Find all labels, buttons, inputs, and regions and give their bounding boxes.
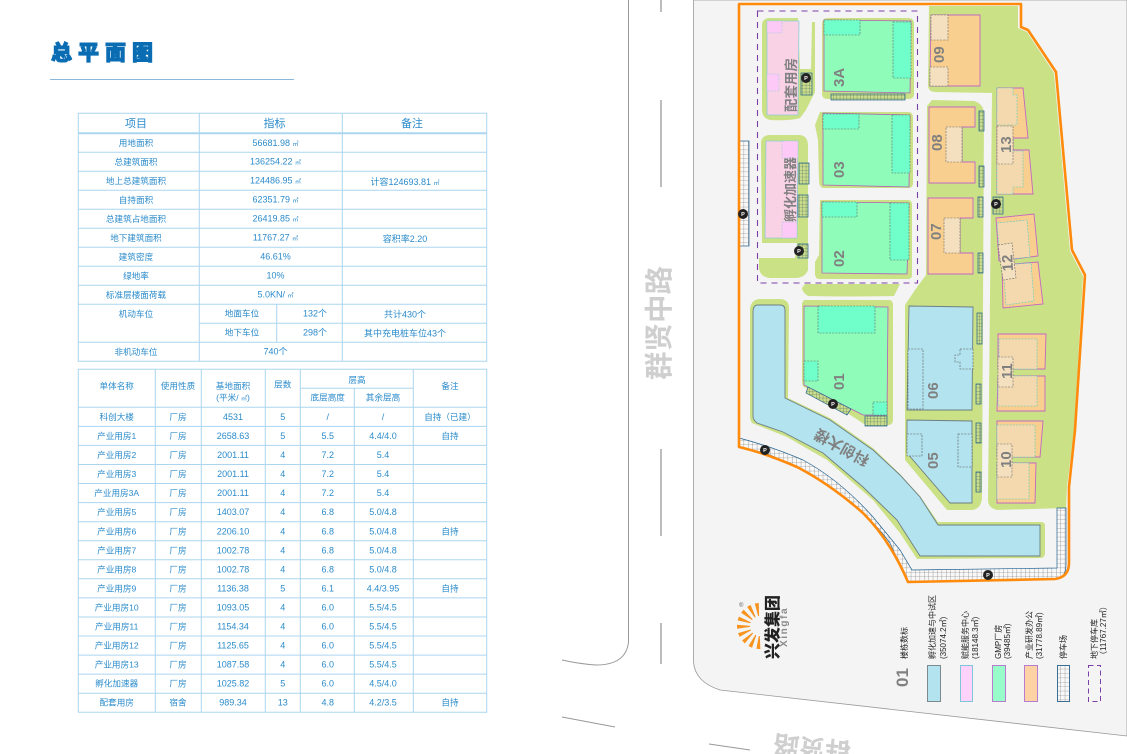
legend: R&D office: [1024, 611, 1044, 702]
table: building schedule: /: [382, 412, 385, 422]
table: building schedule: 4: [280, 507, 285, 517]
road lines: [562, 0, 750, 750]
table: building schedule: 1125.65: [217, 640, 249, 650]
icon: sunburst: [737, 603, 761, 649]
legend: R&D office: (31778.89㎡): [1035, 612, 1044, 659]
building 01: [804, 306, 888, 415]
parking markers: P: [831, 402, 835, 408]
table: building schedule: 科创大楼: [100, 411, 134, 422]
table: project indicators: 总建筑面积: [115, 156, 158, 167]
legend: enablement service center: (18148.3㎡): [971, 616, 980, 659]
table: building schedule: 4: [280, 469, 285, 479]
table: project indicators: 26419.85 ㎡: [252, 214, 299, 224]
table: building schedule: 底层高度: [311, 392, 345, 402]
table: project indicators: 124486.95 ㎡: [250, 176, 301, 186]
table: building schedule: 5: [280, 678, 285, 688]
table: building schedule: 6.0: [321, 622, 334, 632]
table: building schedule: 4: [280, 450, 285, 460]
table: project indicators: 绿地率: [123, 270, 149, 281]
green landscape: [750, 6, 1083, 559]
legend: parking: 停车场: [1058, 635, 1068, 659]
table: project indicators: 自持面积: [119, 194, 154, 205]
legend: enablement service center: [960, 611, 980, 702]
table: building schedule: 厂房: [169, 582, 187, 594]
table: project indicators: 10%: [266, 270, 285, 280]
table: building schedule: 13: [278, 698, 288, 708]
building 02: [822, 202, 909, 274]
table: building schedule: 6.1: [321, 584, 334, 594]
parking markers: P: [986, 573, 990, 579]
table: building schedule: 厂房: [169, 411, 187, 422]
legend: incubation zone: (35074.2㎡): [939, 616, 948, 659]
table: building schedule: 产业用房3: [97, 468, 136, 479]
table: building schedule: 6.8: [321, 526, 334, 536]
building 10: 10: [998, 451, 1015, 468]
table: building schedule: 4.5/4.0: [369, 678, 397, 688]
building 08: [929, 107, 975, 183]
table: building schedule: 1087.58: [217, 660, 249, 670]
table: project indicators: 共计430个: [384, 308, 426, 320]
table: building schedule: 产业用房13: [95, 658, 139, 670]
legend: underground garage: 地下停车库: [1089, 619, 1099, 659]
table: building schedule: 厂房: [169, 658, 187, 670]
table: building schedule: 自持: [441, 430, 459, 441]
table: building schedule: 产业用房1: [97, 430, 136, 441]
table: building schedule: 6.0: [321, 660, 334, 670]
building: incubator: 孵化加速器: [783, 157, 798, 222]
table: building schedule: 宿舍: [169, 696, 187, 708]
table: building schedule: 5.4: [377, 469, 389, 479]
table: building schedule: 1002.78: [217, 546, 249, 556]
table: building schedule: 基地面积: [216, 380, 251, 391]
table: project indicators: 其中充电桩车位43个: [364, 328, 446, 338]
table: project indicators: 740个: [263, 346, 288, 356]
table: building schedule: 厂房: [169, 487, 187, 498]
table: building schedule: 产业用房10: [95, 602, 139, 612]
table: building schedule: 厂房: [169, 468, 187, 479]
building 10: [997, 421, 1043, 503]
table: building schedule: 产业用房11: [95, 620, 139, 632]
table: building schedule: 4: [280, 660, 285, 670]
table: building schedule: 6.8: [321, 546, 334, 556]
table: building schedule: 5.4: [377, 450, 389, 460]
parking strip along boundary: [739, 438, 1066, 582]
table: project indicators: 地上总建筑面积: [106, 175, 166, 186]
table: project indicators: 备注: [401, 116, 423, 130]
table: building schedule: 4.8: [321, 698, 334, 708]
building 13: [997, 88, 1033, 194]
table: building schedule: 5: [280, 584, 285, 594]
table: building schedule: 产业用房2: [97, 449, 136, 460]
logo: Xingfa Group: ®: [739, 602, 744, 609]
table: building schedule: 4.2/3.5: [369, 698, 397, 708]
table: building schedule: 5: [280, 431, 285, 441]
table: project indicators: 地下车位: [225, 326, 260, 338]
table: building schedule: 5.0/4.8: [369, 526, 397, 536]
table: building schedule: 4: [280, 546, 285, 556]
table: building schedule: 5.4: [377, 488, 389, 498]
building 3A: [824, 20, 911, 93]
table: building schedule: 厂房: [169, 620, 187, 632]
legend: building number: [893, 627, 912, 687]
building 11: [997, 334, 1046, 411]
table: building schedule: 4.4/3.95: [367, 584, 399, 594]
table: project indicators: 机动车位: [119, 308, 154, 319]
table: project indicators: 46.61%: [260, 252, 291, 262]
legend: incubation zone: 孵化加速与中试区: [927, 595, 937, 659]
parking markers: P: [804, 76, 808, 82]
parking markers: P: [763, 448, 767, 454]
legend: R&D office: 产业研发办公: [1024, 611, 1034, 659]
building 05: 05: [925, 452, 942, 469]
table: building schedule: 使用性质: [161, 380, 196, 391]
building 07: [928, 198, 973, 274]
parking markers: [738, 73, 1001, 580]
table: building schedule: 2001.11: [217, 488, 249, 498]
building 06: [907, 306, 973, 410]
table: building schedule: 4: [280, 488, 285, 498]
legend: GMP plant: [992, 623, 1012, 702]
table: building schedule: (平米/ ㎡): [216, 392, 250, 402]
table: building schedule: 6.8: [321, 564, 334, 574]
table: building schedule: 7.2: [321, 488, 334, 498]
parking markers: P: [797, 249, 801, 255]
table: building schedule: 1136.38: [217, 584, 249, 594]
table: building schedule: 6.0: [321, 678, 334, 688]
table: building schedule: 厂房: [169, 449, 187, 460]
table: building schedule: 2001.11: [217, 469, 249, 479]
table: project indicators: 5.0KN/ ㎡: [257, 290, 294, 300]
table: building schedule: 孵化加速器: [95, 678, 139, 688]
table: building schedule: 自持: [441, 696, 459, 708]
table: building schedule: 产业用房5: [97, 506, 136, 517]
table: project indicators: 132个: [303, 308, 327, 318]
table: project indicators: 136254.22 ㎡: [250, 156, 301, 166]
table: building schedule: 厂房: [169, 506, 187, 517]
table: building schedule: 5.5/4.5: [369, 640, 397, 650]
building 06: 06: [925, 382, 942, 399]
table: building schedule: 5.0/4.8: [369, 507, 397, 517]
table: building schedule: 6.0: [321, 602, 334, 612]
table: building schedule: 4: [280, 526, 285, 536]
building 09: [930, 15, 980, 86]
table: building schedule: 7.2: [321, 469, 334, 479]
building 03: [823, 113, 910, 187]
table: project indicators: 非机动车位: [115, 346, 158, 357]
legend: underground garage: （11767.27㎡）: [1099, 602, 1108, 659]
table: building schedule: /: [326, 412, 329, 422]
table: building schedule: 1002.78: [217, 564, 249, 574]
table: building schedule: 产业用房9: [97, 582, 136, 594]
table: building schedule: [78, 369, 487, 712]
table: building schedule: 1154.34: [217, 622, 249, 632]
table: building schedule: 7.2: [321, 450, 334, 460]
table: building schedule: 5.5/4.5: [369, 602, 397, 612]
legend: GMP plant: GMP厂房: [993, 625, 1003, 659]
logo: Xingfa Group: Xingfa: [779, 607, 790, 647]
legend: enablement service center: 赋能服务中心: [960, 611, 970, 659]
table: building schedule: 产业用房8: [97, 564, 136, 574]
legend: building number: 楼栋数标: [899, 627, 909, 659]
table: building schedule: 2206.10: [217, 526, 249, 536]
road name: Qunxian Middle Road: 群贤中路: [644, 265, 676, 380]
table: building schedule: 层数: [274, 378, 292, 390]
title: 总平面图: [51, 41, 159, 65]
table: building schedule: 备注: [441, 380, 459, 391]
table: project indicators: 项目: [125, 117, 147, 130]
table: building schedule: 5: [280, 412, 285, 422]
table: building schedule: 4: [280, 622, 285, 632]
table: project indicators: 62351.79 ㎡: [252, 194, 299, 204]
table: building schedule: 5.0/4.8: [369, 564, 397, 574]
table: building schedule: 自持: [441, 526, 459, 536]
building: Kechuang tower: 科创大楼: [811, 425, 873, 469]
table: building schedule: 厂房: [169, 564, 187, 574]
table: project indicators: 计容124693.81 ㎡: [370, 176, 440, 187]
table: building schedule: 产业用房6: [97, 526, 136, 536]
building: support housing: 配套用房: [783, 58, 799, 112]
table: building schedule: 层高: [348, 374, 366, 385]
site boundary: [739, 4, 1085, 582]
table: project indicators: 11767.27 ㎡: [253, 232, 298, 242]
table: building schedule: 4.4/4.0: [369, 431, 397, 441]
table: building schedule: 5.5: [321, 431, 334, 441]
building 02: 02: [831, 250, 848, 267]
table: project indicators: [78, 113, 487, 362]
legend: GMP plant: (39485㎡): [1003, 623, 1012, 659]
building: Kechuang tower: [753, 305, 1040, 556]
building 3A: 3A: [831, 68, 848, 87]
building 03: 03: [831, 161, 848, 178]
building 05: [907, 420, 972, 503]
table: building schedule: 5.5/4.5: [369, 660, 397, 670]
site ground: [694, 0, 1127, 736]
underground garage boundary: [758, 11, 918, 283]
building 08: 08: [929, 134, 946, 151]
table: building schedule: 产业用房3A: [94, 487, 139, 498]
table: building schedule: 1093.05: [217, 602, 249, 612]
table: project indicators: 容积率2.20: [383, 233, 427, 244]
building 09: 09: [931, 46, 948, 63]
table: building schedule: 厂房: [169, 430, 187, 441]
table: building schedule: 厂房: [169, 544, 187, 556]
table: project indicators: 56681.98 ㎡: [252, 138, 299, 148]
table: building schedule: 厂房: [169, 526, 187, 536]
building: support housing: [767, 21, 799, 115]
building 12: [996, 214, 1043, 308]
table: building schedule: 5.5/4.5: [369, 622, 397, 632]
table: building schedule: 产业用房7: [97, 544, 136, 556]
table: project indicators: 指标: [264, 116, 286, 130]
legend: parking: [1058, 635, 1070, 702]
table: building schedule: 配套用房: [100, 696, 134, 708]
building 07: 07: [928, 223, 945, 240]
table: building schedule: 2658.63: [217, 431, 249, 441]
table: project indicators: 建筑密度: [119, 251, 154, 262]
parking markers: P: [741, 212, 745, 218]
table: project indicators: 标准层楼面荷载: [106, 289, 166, 300]
building 12: 12: [999, 254, 1017, 272]
table: building schedule: 989.34: [219, 698, 247, 708]
table: building schedule: 4531: [223, 412, 243, 422]
table: building schedule: 产业用房12: [95, 640, 139, 650]
legend: underground garage: [1088, 602, 1108, 702]
table: project indicators: 地下建筑面积: [110, 232, 162, 243]
table: building schedule: 2001.11: [217, 450, 249, 460]
table: building schedule: 厂房: [169, 602, 187, 612]
building 13: 13: [998, 136, 1015, 153]
table: building schedule: 4: [280, 602, 285, 612]
logo: Xingfa Group: 兴发集团: [763, 595, 782, 659]
building 01: 01: [831, 373, 848, 390]
table: project indicators: 地面车位: [225, 308, 260, 318]
table: building schedule: 自持: [441, 582, 459, 594]
logo: Xingfa Group: [737, 595, 790, 659]
table: building schedule: 4: [280, 640, 285, 650]
table: building schedule: 4: [280, 564, 285, 574]
table: building schedule: 6.0: [321, 640, 334, 650]
table: project indicators: 298个: [303, 328, 327, 338]
table: building schedule: 其余层高: [366, 392, 401, 402]
table: building schedule: 自持（已建）: [424, 411, 476, 422]
parking strip west: [739, 141, 749, 246]
table: building schedule: 5.0/4.8: [369, 546, 397, 556]
legend: incubation zone: [927, 595, 948, 702]
parking bays: [798, 73, 1003, 492]
table: building schedule: 厂房: [169, 640, 187, 650]
building: incubator: [765, 141, 798, 238]
table: project indicators: 用地面积: [119, 137, 154, 148]
legend: building number: 01: [893, 668, 912, 687]
parking markers: P: [994, 202, 998, 208]
table: building schedule: 厂房: [169, 678, 187, 688]
table: building schedule: 6.8: [321, 507, 334, 517]
table: building schedule: 1025.82: [217, 678, 249, 688]
building 11: 11: [999, 363, 1016, 379]
legend: [893, 595, 1108, 702]
table: building schedule: 单体名称: [100, 380, 134, 391]
table: building schedule: 1403.07: [217, 507, 249, 517]
table: project indicators: 总建筑占地面积: [106, 213, 166, 224]
